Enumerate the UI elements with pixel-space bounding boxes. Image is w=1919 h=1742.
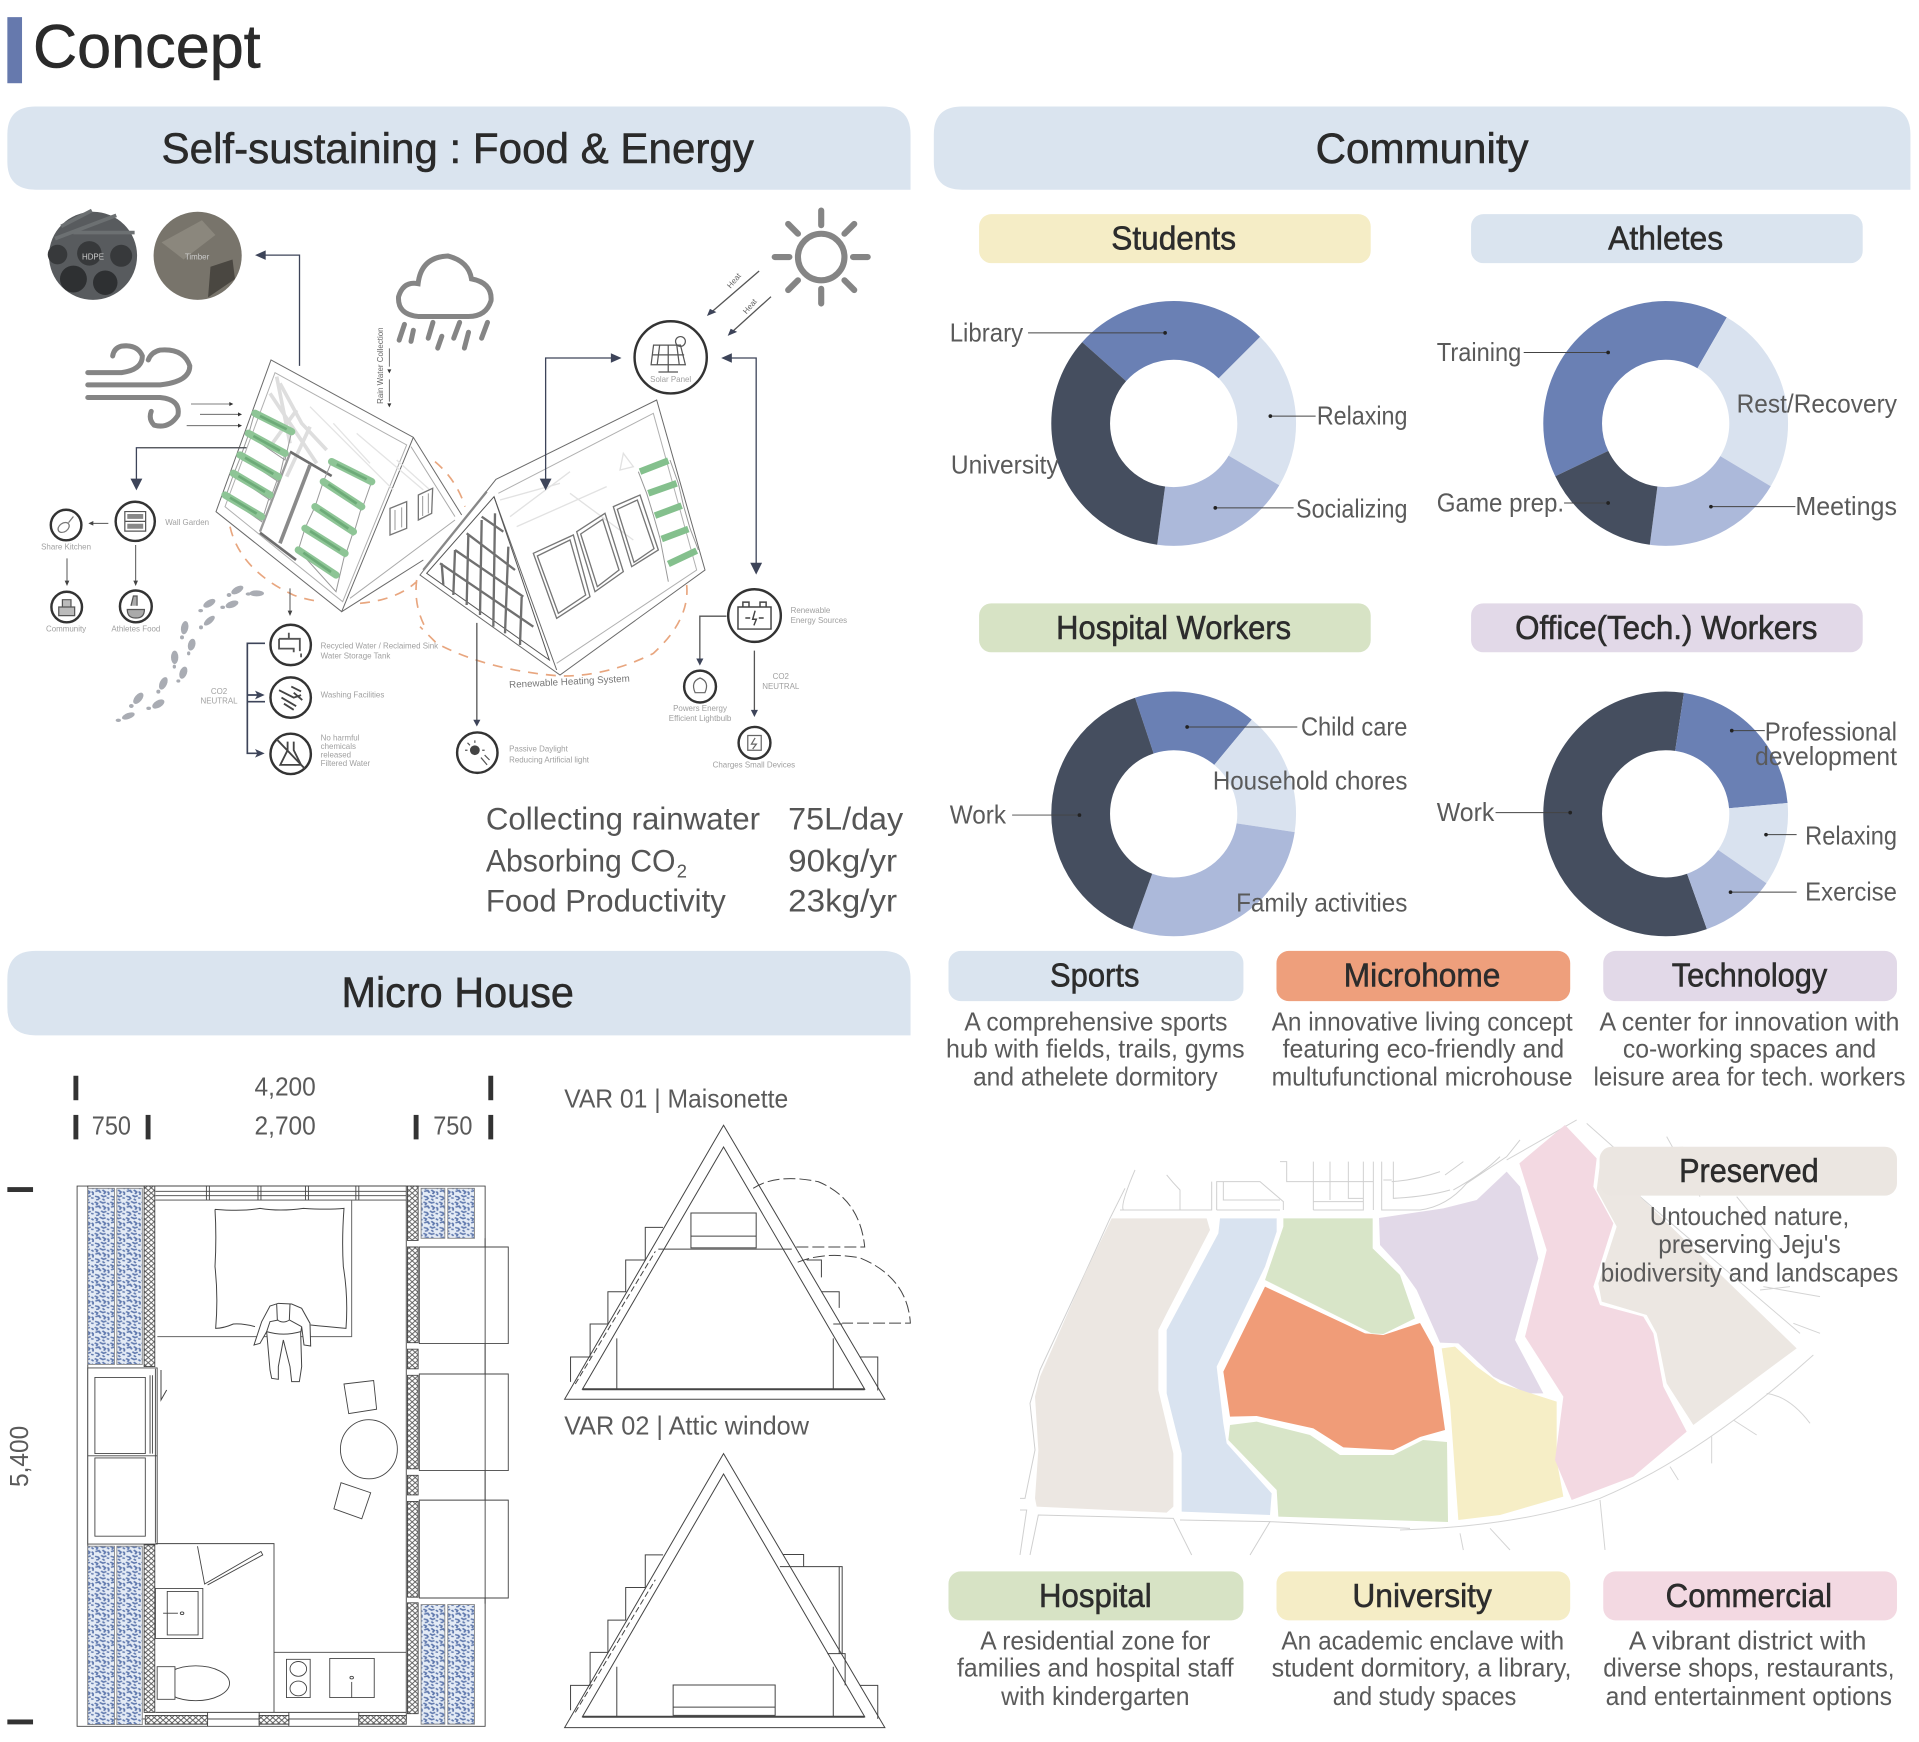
pill: athletes: Athletes <box>1608 221 1723 258</box>
zone: preserved west <box>1035 1218 1210 1513</box>
panel: sustainability diagram <box>41 210 868 774</box>
dimensions: 5,400 <box>6 1426 34 1487</box>
zone card: hospital <box>948 1571 1243 1711</box>
pill: students <box>979 214 1371 263</box>
zone: sports <box>1167 1218 1277 1515</box>
zone card: commercial: A vibrant district with <box>1629 1628 1866 1656</box>
label: CO2 neutral right: NEUTRAL <box>762 682 800 691</box>
panel: micro house header <box>7 951 911 1035</box>
zone card: commercial: Commercial <box>1666 1578 1832 1615</box>
icon: no harmful chemicals: No harmful <box>321 733 360 742</box>
zone card: sports <box>946 951 1245 1092</box>
plan base drawing <box>77 1186 508 1726</box>
labels: office workers: Work <box>1437 799 1494 827</box>
stats table: Food Productivity <box>486 883 726 919</box>
icon: wall garden <box>116 502 209 541</box>
zone: microhome <box>1223 1287 1445 1450</box>
icon: solar panel: Solar Panel <box>650 375 691 384</box>
zone card: technology: A center for innovation with <box>1600 1008 1899 1036</box>
zone card: university: and study spaces <box>1333 1683 1516 1711</box>
label: CO2 neutral left <box>201 687 238 706</box>
person <box>254 1303 311 1382</box>
pill: athletes <box>1471 214 1863 263</box>
pill: office workers: Office(Tech.) Workers <box>1515 610 1817 647</box>
icon: share kitchen <box>41 510 91 551</box>
zone: university <box>1442 1347 1563 1520</box>
icon: wind <box>88 346 190 426</box>
zone card: microhome: Microhome <box>1344 957 1500 994</box>
label: CO2 neutral left: CO2 <box>211 687 228 696</box>
bed <box>157 1200 352 1337</box>
labels: hospital workers: Child care <box>1301 714 1407 742</box>
zone card: microhome: featuring eco-friendly and <box>1283 1035 1564 1063</box>
panel: community header <box>934 106 1910 190</box>
label: heat <box>725 271 759 316</box>
zone card: university: student dormitory, a library, <box>1272 1655 1571 1683</box>
connectors: left icon network <box>65 521 292 758</box>
wall planters on left house <box>225 413 372 592</box>
zone card: university: University <box>1352 1578 1492 1615</box>
stats table: 90kg/yr <box>788 842 898 878</box>
icon: passive daylight: Reducing Artificial light <box>509 755 590 764</box>
roof windows <box>533 495 658 618</box>
context roads southeast <box>1400 1120 1820 1550</box>
icon: sun <box>775 210 868 304</box>
photo: HDPE pipes <box>48 210 137 300</box>
zones east <box>1379 1125 1797 1520</box>
labels: office workers: Professional <box>1765 718 1897 746</box>
photo: HDPE pipes: HDPE <box>82 252 104 261</box>
labels: athletes: Meetings <box>1795 493 1897 521</box>
icon: charges small devices <box>713 727 795 769</box>
zone card: microhome: multufunctional microhouse <box>1272 1064 1573 1092</box>
labels: students: University <box>951 452 1059 480</box>
icon: share kitchen: Share Kitchen <box>41 542 91 551</box>
labels: athletes <box>1437 339 1897 521</box>
panel: self-sustaining header: Self-sustaining : Food & Energy <box>162 125 754 173</box>
hatched insulation strips <box>144 1186 418 1724</box>
icon: athletes food <box>111 590 160 633</box>
icon: renewable energy battery <box>728 589 847 642</box>
zone: commercial <box>1519 1125 1687 1500</box>
west window <box>88 1368 157 1544</box>
zone card: hospital: Hospital <box>1039 1578 1152 1615</box>
labels: hospital workers: Family activities <box>1236 890 1407 918</box>
stats table: Collecting rainwater <box>486 801 760 837</box>
zone card: preserved: biodiversity and landscapes <box>1601 1259 1898 1287</box>
stats table: 23kg/yr <box>788 883 898 919</box>
bed, person and door swing <box>157 1200 352 1400</box>
icon: no harmful chemicals: chemicals <box>321 742 356 751</box>
dimensions: 2,700 <box>255 1112 316 1140</box>
zone: hospital north <box>1265 1218 1415 1334</box>
zone card: commercial <box>1603 1571 1897 1711</box>
gable window grid <box>440 513 533 645</box>
panel: self-sustaining header <box>7 106 911 190</box>
icon: lightbulb: Efficient Lightbulb <box>669 714 732 723</box>
panel: community header: Community <box>1316 125 1529 173</box>
icon: lightbulb: Powers Energy <box>673 704 727 713</box>
site map <box>1020 1120 1820 1555</box>
label: CO2 neutral right: CO2 <box>773 672 790 681</box>
zone card: commercial: diverse shops, restaurants, <box>1603 1655 1895 1683</box>
icon: wall garden: Wall Garden <box>165 518 209 527</box>
shell walls <box>77 1186 485 1726</box>
icon: renewable energy battery: Renewable <box>791 606 831 615</box>
icon: lightbulb <box>669 671 732 723</box>
right house <box>420 400 705 675</box>
icon: recycled water: Recycled Water / Reclaimed Sink <box>321 642 438 651</box>
label: renewable heating system: Renewable Heating System <box>509 674 630 691</box>
floor plan <box>77 1186 508 1726</box>
zone card: university: An academic enclave with <box>1281 1628 1564 1656</box>
donut chart: students <box>1081 330 1267 516</box>
zone card: technology: co-working spaces and <box>1623 1035 1876 1063</box>
zone card: microhome: An innovative living concept <box>1272 1008 1573 1036</box>
zone card: sports: Sports <box>1050 957 1139 994</box>
label: var 01: VAR 01 | Maisonette <box>564 1086 788 1114</box>
zone card: sports: hub with fields, trails, gyms <box>946 1035 1245 1063</box>
labels: office workers: development <box>1755 743 1897 771</box>
wall planters on right house <box>638 460 698 582</box>
zone card: technology: leisure area for tech. workers <box>1593 1064 1906 1092</box>
zone card: preserved: preserving Jeju's <box>1658 1231 1841 1259</box>
icon: no harmful chemicals <box>270 733 371 774</box>
labels: students: Socializing <box>1296 496 1407 524</box>
label: heat: Heat <box>725 271 743 290</box>
zone card: sports: A comprehensive sports <box>964 1008 1228 1036</box>
icon: athletes food: Athletes Food <box>111 624 160 633</box>
heating loop dashed <box>230 462 687 676</box>
icon: recycled water: Water Storage Tank <box>321 651 390 660</box>
icon: community: Community <box>46 624 86 633</box>
dimensions <box>6 1073 493 1724</box>
zone card: hospital: A residential zone for <box>980 1628 1211 1656</box>
kitchen <box>274 1652 406 1698</box>
donut chart: athletes <box>1573 330 1759 516</box>
icon: washing facilities <box>270 677 384 718</box>
zone: hospital south <box>1228 1422 1448 1522</box>
table and chairs <box>334 1381 397 1519</box>
icon: washing facilities: Washing Facilities <box>321 691 384 700</box>
panel: micro house header: Micro House <box>341 969 574 1017</box>
section: var 01 maisonette <box>565 1125 910 1399</box>
zone: technology <box>1379 1172 1543 1393</box>
labels: athletes: Rest/Recovery <box>1737 390 1897 418</box>
label: rain water collection: Rain Water Collection <box>376 327 385 404</box>
zone card: preserved: Untouched nature, <box>1650 1203 1849 1231</box>
stats table <box>486 801 903 919</box>
icon: passive daylight: Passive Daylight <box>509 744 569 753</box>
label: CO2 neutral left: NEUTRAL <box>201 697 238 706</box>
zone card: microhome <box>1272 951 1573 1092</box>
zone card: preserved <box>1600 1147 1898 1287</box>
labels: office workers: Relaxing <box>1805 822 1897 850</box>
label: var 02: VAR 02 | Attic window <box>564 1412 809 1440</box>
context roads southwest <box>1020 1188 1410 1555</box>
dimensions: 4,200 <box>255 1073 316 1101</box>
zone card: hospital: with kindergarten <box>1000 1683 1190 1711</box>
icon: no harmful chemicals: released <box>321 751 351 760</box>
icon: no harmful chemicals: Filtered Water <box>321 759 371 768</box>
labels: hospital workers <box>950 714 1407 918</box>
bathroom <box>155 1544 274 1712</box>
wind and rain arrows <box>140 348 391 448</box>
stats table: Absorbing CO <box>486 842 676 878</box>
weather icons in diagram frame <box>88 256 491 426</box>
zone card: technology: Technology <box>1672 957 1828 994</box>
label: CO2 neutral right <box>762 672 800 691</box>
icon: rain cloud <box>398 256 491 348</box>
section: var 02 attic window <box>565 1454 885 1728</box>
footprints <box>116 584 264 722</box>
pill: students: Students <box>1111 221 1236 258</box>
zone card: commercial: and entertainment options <box>1606 1683 1892 1711</box>
pill: office workers <box>1471 603 1863 652</box>
right planter boxes <box>419 1238 508 1604</box>
zone card: university <box>1272 1571 1571 1711</box>
planting panels <box>88 1188 474 1725</box>
icon: passive daylight <box>457 732 590 773</box>
icon: charges small devices: Charges Small Devices <box>713 760 795 769</box>
photo: timber <box>154 212 242 300</box>
left house <box>216 360 462 612</box>
labels: office workers: Exercise <box>1805 879 1897 907</box>
pill: hospital workers <box>979 603 1371 652</box>
dimensions: 750 <box>433 1112 472 1140</box>
context roads north <box>1120 1140 1520 1210</box>
photo: timber: Timber <box>185 252 210 261</box>
stats table: 2 <box>677 860 687 881</box>
donut chart: office workers <box>1573 721 1759 907</box>
pill: hospital workers: Hospital Workers <box>1056 610 1291 647</box>
icon: community <box>46 592 86 633</box>
zone card: hospital: families and hospital staff <box>957 1655 1234 1683</box>
dimensions: 750 <box>92 1112 131 1140</box>
icon: solar panel <box>635 321 707 393</box>
labels: students: Relaxing <box>1317 403 1407 431</box>
zone card: preserved: Preserved <box>1679 1153 1819 1190</box>
labels: athletes: Game prep. <box>1437 490 1564 518</box>
icon: renewable energy battery: Energy Sources <box>791 616 847 625</box>
zones west <box>1035 1218 1448 1522</box>
label: heat: Heat <box>741 297 759 316</box>
donut chart: hospital workers <box>1081 721 1267 907</box>
title: Concept <box>33 12 261 80</box>
zone: preserved east <box>1597 1147 1797 1425</box>
labels: office workers <box>1437 718 1897 907</box>
labels: hospital workers: Work <box>950 802 1006 830</box>
labels: hospital workers: Household chores <box>1213 767 1407 795</box>
stats table: 75L/day <box>788 801 903 837</box>
labels: athletes: Training <box>1437 339 1521 367</box>
labels: students <box>950 319 1407 524</box>
icon: recycled water <box>270 625 438 665</box>
labels: students: Library <box>950 319 1023 347</box>
arrows <box>130 250 771 726</box>
zone card: sports: and athelete dormitory <box>973 1064 1218 1092</box>
zone card: technology <box>1593 951 1906 1092</box>
